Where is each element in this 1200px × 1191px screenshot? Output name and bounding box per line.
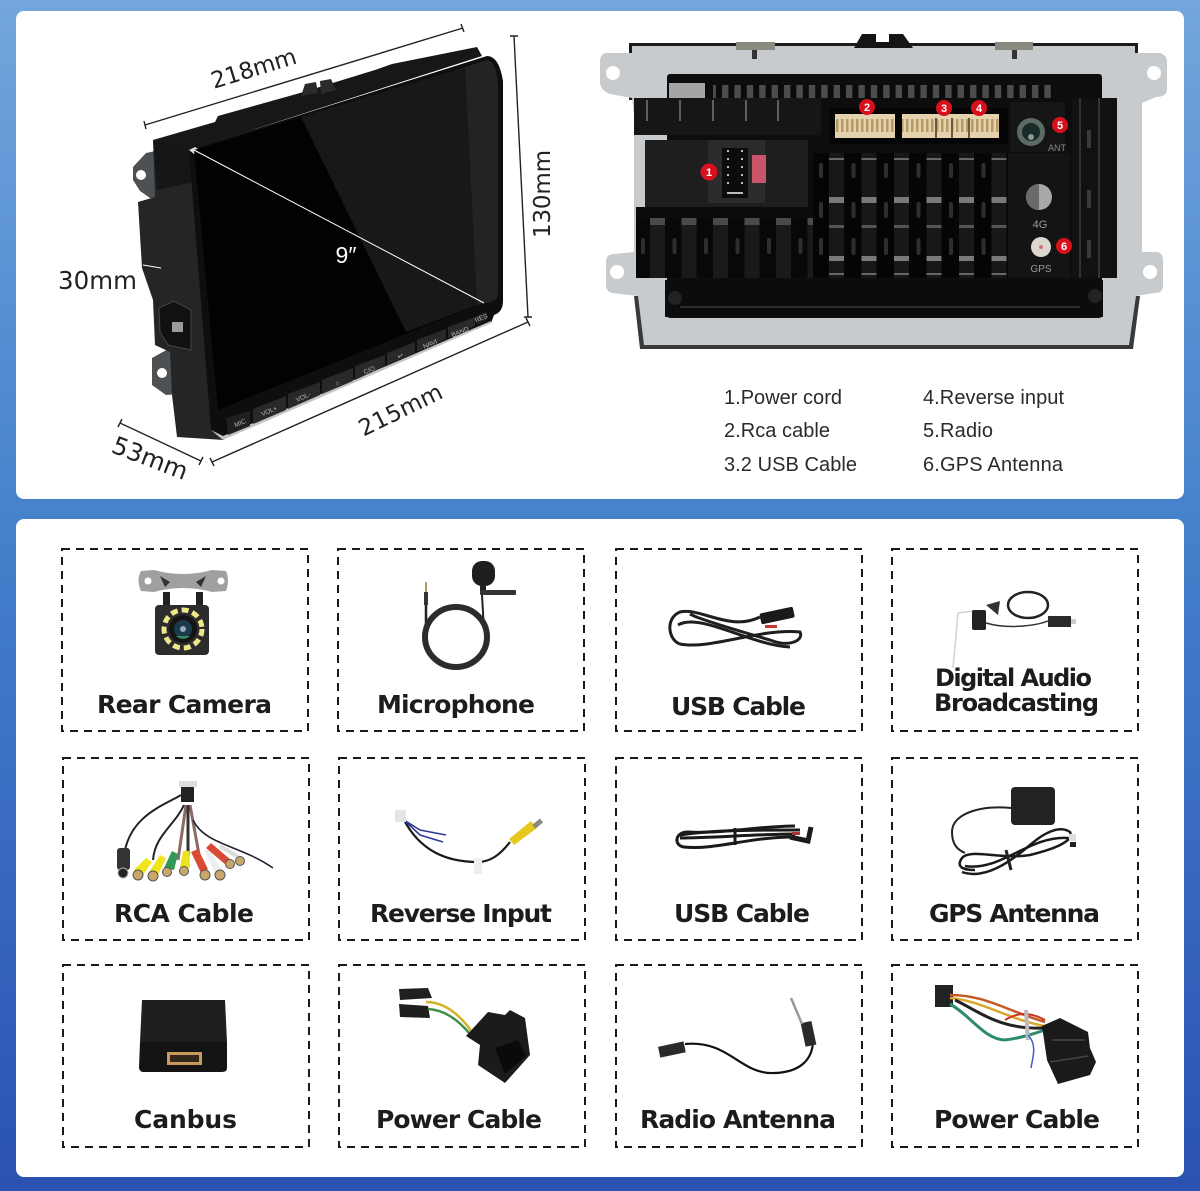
panel: dimensions and rear ports [16, 11, 1184, 499]
GPS and 4G panel: 4G [1033, 219, 1047, 231]
icon: microphone [424, 561, 516, 667]
icon: RCA cable [117, 781, 273, 881]
marker 1 [700, 164, 718, 180]
right ribs [1072, 98, 1117, 278]
button strip: ⌂ [334, 380, 341, 388]
marker 2: 2 [864, 102, 870, 114]
dimension: 30mm: 30mm [58, 266, 137, 295]
marker 1: 1 [706, 167, 712, 179]
marker 3: 3 [941, 103, 947, 115]
mounting ears [133, 150, 192, 395]
icon: USB cable [670, 607, 801, 647]
icon: DAB antenna [953, 592, 1076, 668]
label: Reverse Input [370, 899, 552, 928]
GPS and 4G panel [1008, 153, 1070, 278]
card: USB cable [616, 549, 862, 731]
marker 3 [936, 100, 952, 116]
dimension: 130mm [510, 36, 556, 317]
dimension: 215mm: 215mm [355, 379, 447, 442]
button strip: RES [474, 313, 490, 324]
body side [138, 140, 224, 440]
card: GPS antenna [892, 758, 1138, 940]
label: Digital Audio [935, 664, 1092, 692]
dimension: 218mm [144, 24, 464, 129]
icon: wiring harness [935, 985, 1096, 1084]
card: radio antenna [616, 965, 862, 1147]
button strip: NAVI [422, 338, 439, 351]
button strip: MIC [234, 418, 248, 429]
card: digital audio broadcasting [892, 549, 1138, 731]
marker 2 [859, 99, 875, 115]
dimension: 215mm [210, 318, 530, 466]
label: RCA Cable [114, 899, 254, 928]
dimension: 53mm: 53mm [108, 430, 192, 486]
card: power cable [339, 965, 585, 1147]
top clip [301, 79, 336, 96]
marker 5 [1052, 117, 1068, 133]
port legend: 1.Power cord [724, 387, 842, 409]
marker 6: 6 [1061, 241, 1067, 253]
marker 4 [971, 100, 987, 116]
marker 5: 5 [1057, 120, 1063, 132]
button strip: BAND [451, 326, 470, 339]
GPS and 4G panel: GPS [1030, 264, 1052, 275]
icon: rear camera [138, 570, 228, 655]
diagonal [194, 150, 484, 303]
label: Power Cable [934, 1105, 1100, 1134]
side bracket [159, 301, 191, 350]
icon: reverse cable [395, 810, 543, 874]
icon: power harness [399, 988, 530, 1083]
stereo front view [133, 47, 503, 440]
card: digital audio broadcasting: Broadcasting [934, 689, 1099, 717]
marker 6 [1056, 238, 1072, 254]
card: second USB cable [616, 758, 862, 940]
port legend: 2.Rca cable [724, 420, 830, 442]
port legend [724, 387, 1064, 476]
label: Radio Antenna [640, 1105, 836, 1134]
button strip: C/⏻ [363, 365, 376, 376]
label: GPS Antenna [929, 899, 1100, 928]
card: second power cable [892, 965, 1138, 1147]
port legend: 5.Radio [923, 420, 993, 442]
label: Rear Camera [97, 690, 272, 719]
icon: canbus box [139, 1000, 227, 1072]
bezel [189, 56, 503, 438]
black housing [667, 74, 1102, 318]
text: screen size: 9″ [336, 242, 356, 268]
label: USB Cable [674, 899, 810, 928]
panel: accessories [16, 519, 1184, 1177]
top rim [153, 47, 482, 150]
card: canbus [63, 965, 309, 1147]
label: Canbus [134, 1105, 237, 1134]
radio antenna socket: ANT [1048, 143, 1067, 153]
button strip: VOL- [295, 391, 312, 404]
dimension: 130mm: 130mm [530, 150, 556, 238]
label: Microphone [377, 690, 535, 719]
top clips [736, 34, 1033, 59]
button strip: VOL+ [260, 405, 279, 418]
marker 4: 4 [976, 103, 983, 115]
card: rear camera [62, 549, 308, 731]
screen [194, 67, 477, 410]
icon: radio antenna [658, 998, 816, 1073]
label: Power Cable [376, 1105, 542, 1134]
port legend: 6.GPS Antenna [923, 454, 1064, 476]
power socket [708, 140, 766, 203]
dimension: 218mm: 218mm [208, 44, 300, 95]
metal chassis [600, 43, 1167, 349]
card: microphone [338, 549, 584, 731]
icon: USB cable coil [677, 826, 811, 847]
port legend: 3.2 USB Cable [724, 454, 857, 476]
upper left block [634, 98, 821, 135]
vertical ribs [813, 153, 1008, 278]
stereo rear view [600, 34, 1167, 349]
card: RCA cable [63, 758, 309, 940]
label: USB Cable [671, 692, 806, 721]
radio antenna socket [1010, 102, 1067, 153]
button strip [226, 312, 490, 435]
button strip: ↩ [397, 352, 405, 361]
bottom bar [665, 280, 1103, 317]
connector blocks [830, 108, 1008, 144]
card: reverse input [339, 758, 585, 940]
icon: GPS antenna [952, 787, 1076, 874]
port legend: 4.Reverse input [923, 387, 1064, 409]
